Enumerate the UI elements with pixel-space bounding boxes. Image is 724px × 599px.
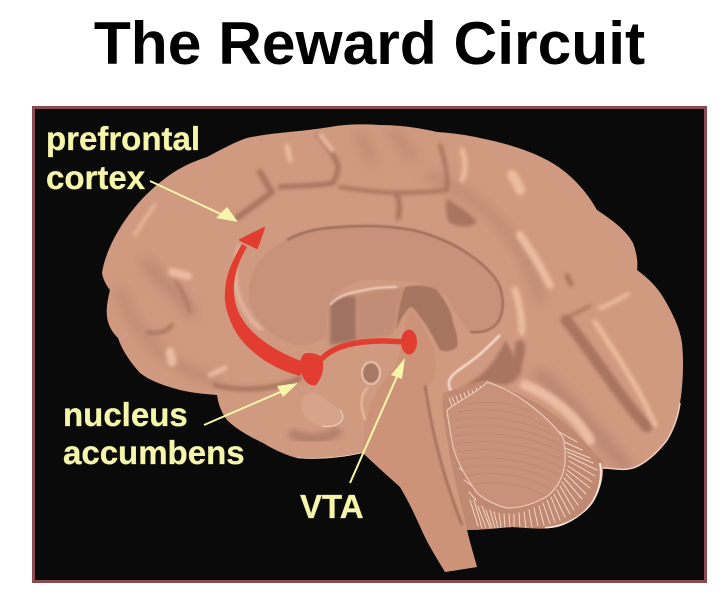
title: The Reward Circuit xyxy=(94,9,645,77)
label: nucleus accumbens: accumbens xyxy=(63,434,245,471)
reward pathway: red arrow to prefrontal cortex xyxy=(225,228,417,385)
label: prefrontal cortex: cortex xyxy=(46,159,146,196)
fornix: dark area under callosum xyxy=(396,286,457,351)
panel: brain image xyxy=(34,108,706,582)
brain: sagittal section xyxy=(102,124,683,572)
label: nucleus accumbens xyxy=(63,383,298,471)
label: prefrontal cortex: prefrontal xyxy=(46,120,200,157)
optic chiasm and pituitary xyxy=(302,393,343,426)
corpus callosum xyxy=(249,226,503,345)
pathway from VTA xyxy=(318,341,408,363)
arrow: nucleus accumbens xyxy=(204,383,298,425)
arrow: VTA xyxy=(350,358,405,483)
shading: sulci xyxy=(148,135,647,463)
arrow: prefrontal cortex xyxy=(150,181,238,222)
thalamus xyxy=(358,288,403,340)
shading: soft lobes xyxy=(120,132,625,465)
label: prefrontal cortex xyxy=(46,120,238,222)
label: VTA xyxy=(300,358,405,525)
nucleus accumbens blob xyxy=(300,353,323,385)
callosal sulcus: dark upper edge xyxy=(287,226,503,332)
ventricle: dark area xyxy=(330,296,357,345)
cerebellum xyxy=(442,380,601,530)
midbrain and brainstem xyxy=(364,454,477,572)
label: VTA: VTA xyxy=(300,488,364,525)
VTA blob xyxy=(401,330,417,354)
lower rim highlight xyxy=(603,403,680,469)
dark patch in parietal lobe xyxy=(446,198,477,226)
shading: highlights xyxy=(135,135,655,440)
label: nucleus accumbens: nucleus xyxy=(63,396,188,433)
